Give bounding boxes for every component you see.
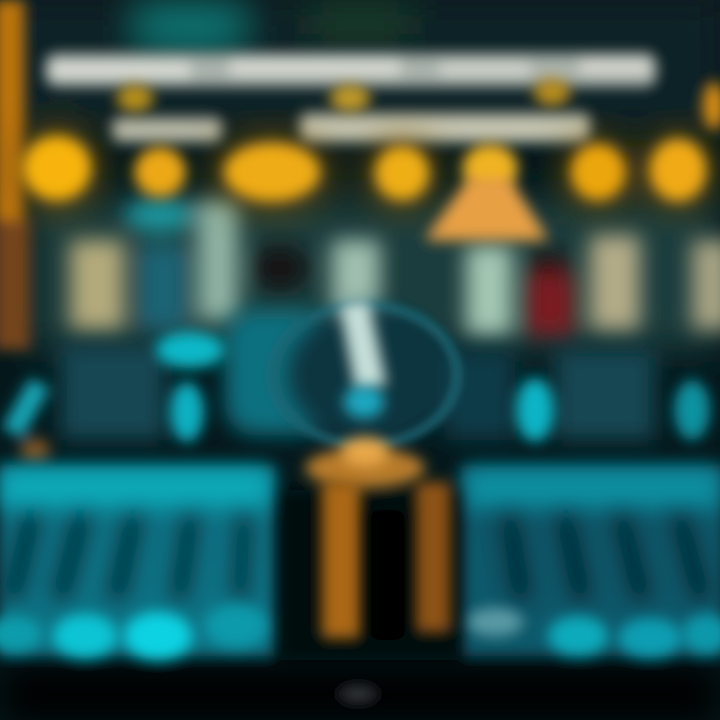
panel: bottom left teal: [0, 466, 274, 660]
orange lamp shade: [425, 178, 548, 240]
lamp 3: [224, 143, 320, 201]
lamp 6: [571, 144, 625, 200]
teal middle band: [60, 305, 655, 445]
accent right drop: [516, 378, 554, 442]
title bars: [46, 54, 656, 142]
title line two: [112, 118, 222, 142]
podium dome highlight: [341, 438, 389, 466]
hanging lamps: [13, 78, 720, 210]
top highlight: [465, 468, 720, 508]
podium right leg: [416, 482, 450, 632]
lamp 2: [134, 147, 186, 197]
podium inner shadow: [368, 510, 406, 640]
panel: far-left beige: [70, 240, 124, 330]
bottom glow: [53, 614, 117, 658]
lamp 5: [462, 144, 518, 192]
bottom glow: [467, 608, 523, 636]
accent left edge: [2, 378, 50, 438]
small lamp c: [534, 78, 570, 106]
panel: central pale figure: [332, 240, 380, 340]
bright teal accents: [2, 332, 710, 462]
figure: teal torso: [225, 310, 330, 435]
title line one: [46, 54, 656, 86]
small lamp b: [330, 84, 370, 112]
upper wall panels: [70, 199, 720, 340]
panel: pale left column: [198, 200, 238, 320]
accent right edge: [674, 380, 710, 440]
wreath ring: [273, 305, 457, 445]
lamp 1: [23, 136, 91, 200]
accent left drop: [170, 382, 204, 442]
accent left shoulder: [156, 332, 224, 368]
podium dark gap: [280, 490, 460, 660]
small orange spark: [20, 438, 50, 462]
panel: teal left: [138, 245, 188, 330]
podium left leg: [322, 482, 360, 638]
figure: dark red: [525, 272, 575, 336]
figure: dark head: [250, 244, 310, 292]
panel: far-right beige: [692, 240, 720, 330]
lamp glow: [13, 126, 714, 210]
teal glow under figure: [344, 386, 384, 418]
centre emblem: [273, 300, 457, 445]
diagonal columns: [500, 515, 712, 600]
accent: teal under lamp: [124, 199, 196, 231]
central orange podium: [280, 438, 460, 660]
seat left: [60, 345, 165, 440]
small lamp a: [117, 84, 153, 112]
top highlight: [0, 468, 270, 508]
seat right: [445, 350, 515, 440]
footer logo mark: [338, 686, 378, 702]
podium top: [305, 448, 425, 488]
lamp 4: [375, 146, 429, 200]
centre circle backdrop: [285, 305, 455, 445]
panel: bottom right teal: [462, 466, 720, 658]
panel: pale right column: [466, 245, 512, 335]
lamp 8: [703, 82, 720, 130]
left orange pillar: [0, 0, 30, 350]
diagonal columns: [2, 515, 252, 600]
central white figure: [340, 300, 386, 390]
panel: right beige: [590, 235, 640, 330]
lamp 7: [650, 139, 706, 201]
